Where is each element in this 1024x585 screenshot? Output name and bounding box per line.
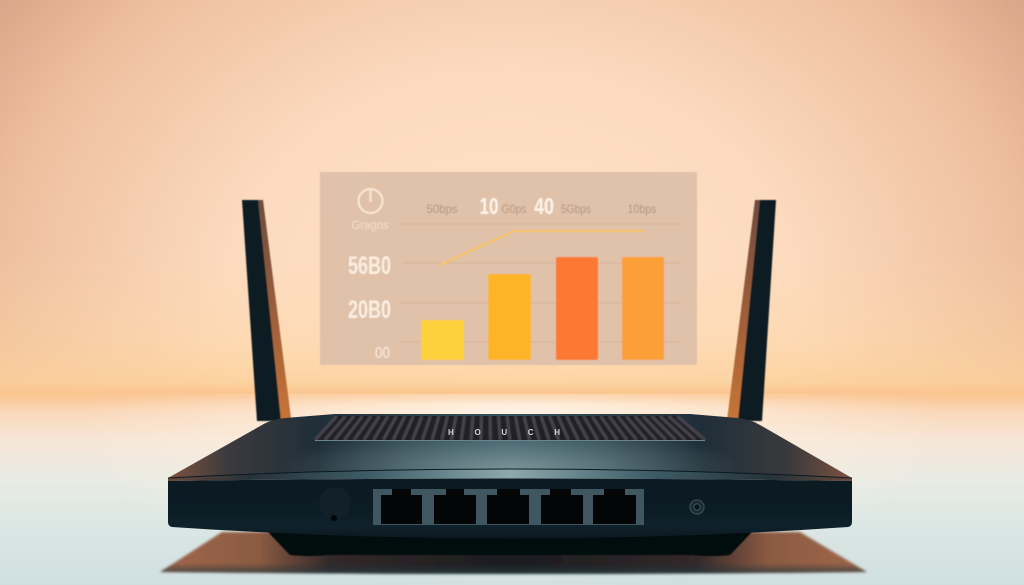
- front lip highlight: [168, 469, 852, 481]
- column labels: 50bps: [426, 202, 458, 216]
- y axis labels: 56B0: [348, 252, 391, 280]
- router: [168, 414, 852, 556]
- bar chart: [421, 257, 664, 360]
- front face: [168, 478, 852, 538]
- floating chart panel: [320, 172, 697, 365]
- status LED: [690, 500, 704, 514]
- ethernet ports: [373, 489, 644, 525]
- left antenna: [242, 200, 291, 421]
- column labels: G0ps: [502, 202, 526, 216]
- icon: power gauge: [358, 189, 382, 213]
- vent grille: [315, 416, 705, 440]
- column labels: [426, 193, 656, 219]
- trend line: [440, 231, 645, 265]
- column labels: 5Gbps: [561, 202, 591, 216]
- column labels: 40: [534, 193, 554, 219]
- brand text: HOUCH: [448, 428, 560, 437]
- background wall: [0, 0, 1024, 398]
- column labels: 10: [480, 193, 498, 219]
- power button: [319, 487, 351, 521]
- y axis labels: [348, 252, 391, 362]
- y axis labels: 00: [375, 345, 390, 362]
- column labels: 10bps: [628, 202, 656, 216]
- background floor: [0, 388, 1024, 585]
- router shadow: [160, 532, 867, 574]
- right antenna: [727, 200, 776, 421]
- y axis labels: 20B0: [348, 296, 391, 324]
- router top surface: [168, 414, 852, 478]
- router underside and feet: [268, 532, 752, 556]
- icon label: Gragns: [352, 220, 389, 232]
